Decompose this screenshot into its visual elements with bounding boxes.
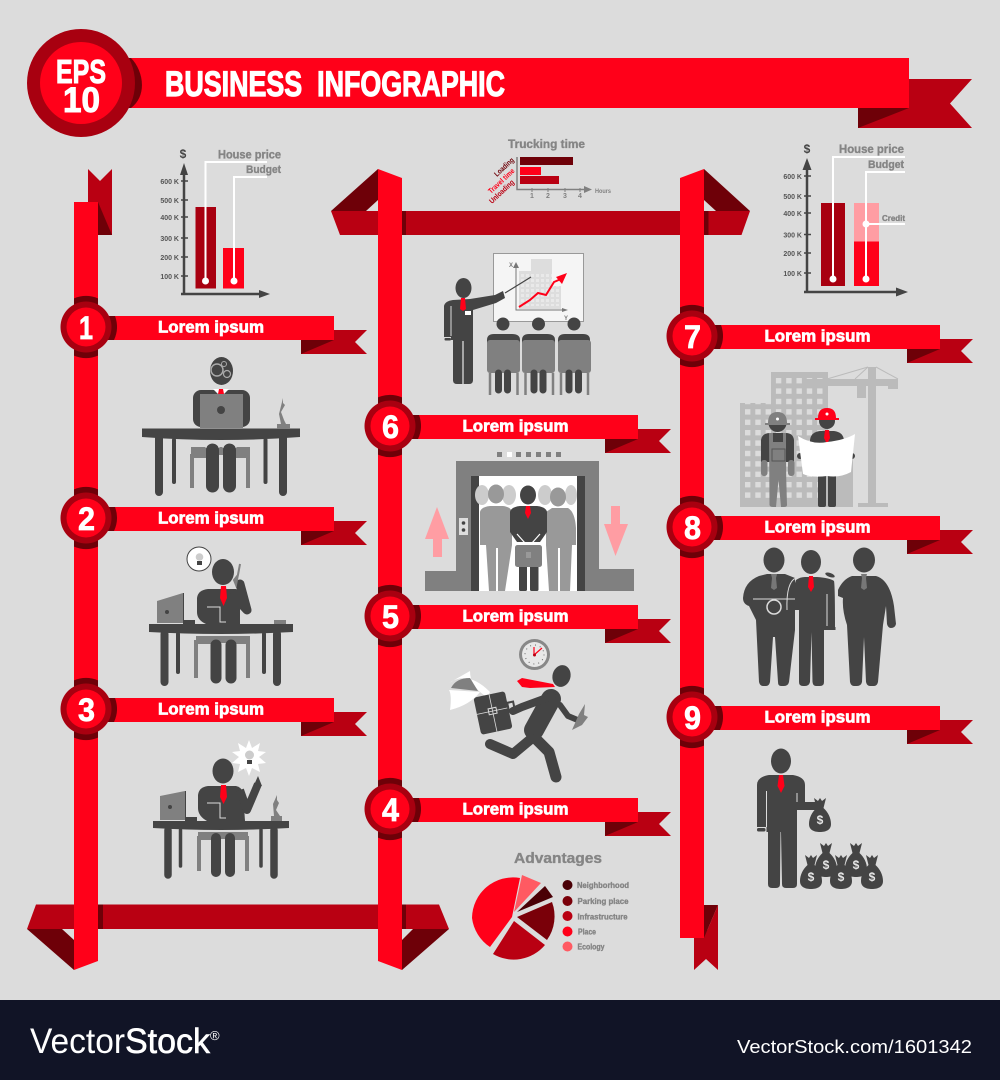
step 3 ribbon <box>60 678 367 740</box>
chart: trucking time: Unloading <box>487 178 516 205</box>
step 6 ribbon: Lorem ipsum <box>462 416 568 436</box>
step 7 ribbon: Lorem ipsum <box>764 326 870 346</box>
footer logo: Vector <box>30 1022 125 1061</box>
chart: house price vs budget: House price <box>218 150 281 162</box>
passenger left <box>480 484 512 591</box>
chart: house price vs budget <box>160 147 281 298</box>
chart: house price, budget and credit: 600 K <box>783 174 802 181</box>
step 6 ribbon <box>364 395 671 457</box>
illustration: construction site <box>740 367 898 507</box>
money bags: $ <box>869 870 876 884</box>
audience member 3 <box>558 318 591 395</box>
illustration: man with money bags <box>757 748 883 889</box>
step 2 ribbon: Lorem ipsum <box>158 508 264 528</box>
footer logo: Stock <box>125 1022 210 1061</box>
chart: house price vs budget: 500 K <box>160 198 179 205</box>
money bags: $ <box>823 858 830 872</box>
chart: house price, budget and credit: House price <box>839 144 904 156</box>
chart: trucking time: 2 <box>546 193 550 200</box>
step 6 ribbon: 6 <box>382 409 399 445</box>
passenger right <box>546 488 576 591</box>
audience member 2 <box>522 318 555 395</box>
chart: house price, budget and credit: 500 K <box>783 194 802 201</box>
step 1 ribbon <box>60 296 367 358</box>
whiteboard: Y <box>564 316 568 322</box>
engineer <box>797 408 855 507</box>
telephone <box>271 795 282 821</box>
legend: Neighborhood <box>577 881 629 890</box>
runner <box>490 663 580 777</box>
idea burst <box>232 740 266 776</box>
money bags: $ <box>808 870 815 884</box>
chart: trucking time: Trucking time <box>508 137 585 151</box>
step 2 ribbon: 2 <box>78 501 95 537</box>
legend: Place <box>578 928 596 936</box>
arrow up <box>425 507 449 557</box>
crane <box>803 367 898 507</box>
footer logo <box>30 1022 220 1061</box>
legend: Ecology <box>578 942 605 952</box>
step 8 ribbon <box>666 496 973 558</box>
badge text: EPS 10 <box>56 53 106 120</box>
clock <box>519 639 550 670</box>
step 7 ribbon <box>666 305 973 367</box>
chart: house price vs budget: 200 K <box>160 255 179 262</box>
briefcase <box>515 545 542 567</box>
money bags <box>800 798 883 889</box>
man left <box>743 548 795 686</box>
step 5 ribbon <box>364 585 671 647</box>
money bags: $ <box>853 858 860 872</box>
step 7 ribbon: 7 <box>684 319 701 355</box>
legend <box>562 880 629 952</box>
chart: house price, budget and credit <box>783 142 908 296</box>
chart: house price vs budget: 100 K <box>160 274 179 281</box>
footer url: VectorStock.com/1601342 <box>737 1036 972 1057</box>
step 9 ribbon: 9 <box>684 700 701 736</box>
chart: trucking time: Hours <box>595 189 612 195</box>
chart: house price vs budget: 400 K <box>160 215 179 222</box>
illustration: three businessmen <box>743 548 896 686</box>
phone <box>572 704 588 730</box>
ribbon frame <box>27 169 750 970</box>
header banner <box>27 29 972 137</box>
legend: Parking place <box>578 897 629 906</box>
chart: house price, budget and credit: $ <box>804 142 811 156</box>
chart: house price vs budget: 300 K <box>160 236 179 243</box>
badge text: EPS 10: EPS <box>56 53 106 90</box>
audience <box>487 318 520 395</box>
step 8 ribbon: 8 <box>684 510 701 546</box>
chart: house price vs budget: Budget <box>246 164 281 176</box>
papers <box>449 671 490 710</box>
step 9 ribbon: Lorem ipsum <box>764 708 870 726</box>
step 9 ribbon <box>666 686 973 748</box>
footer bar <box>0 1000 1000 1080</box>
whiteboard: X <box>509 263 513 269</box>
title: BUSINESS INFOGRAPHIC <box>165 65 505 104</box>
chart: house price, budget and credit: 400 K <box>783 211 802 218</box>
chart: trucking time: 1 <box>530 193 534 200</box>
illustration: elevator <box>425 452 634 591</box>
illustration: man with laptop at desk <box>142 357 300 492</box>
step 1 ribbon: Lorem ipsum <box>158 318 264 336</box>
chart: house price, budget and credit: 300 K <box>783 232 802 240</box>
illustration: man on phone at desk <box>149 547 293 682</box>
step 2 ribbon <box>60 487 367 549</box>
badge text: EPS 10: 10 <box>63 81 100 120</box>
chart: house price, budget and credit: Budget <box>868 159 904 171</box>
man right <box>838 548 896 686</box>
step 5 ribbon: 5 <box>382 599 399 635</box>
step 4 ribbon: Lorem ipsum <box>462 800 568 818</box>
chart: house price, budget and credit: 100 K <box>783 271 802 278</box>
legend: Infrastructure <box>578 912 628 922</box>
tie <box>517 678 555 688</box>
step 4 ribbon <box>364 778 671 840</box>
money bags: $ <box>817 813 824 827</box>
man middle <box>786 550 836 686</box>
handshake <box>753 578 796 614</box>
chart: house price, budget and credit: 200 K <box>783 251 802 258</box>
chart: house price vs budget: $ <box>180 147 187 161</box>
step 5 ribbon: Lorem ipsum <box>462 606 568 626</box>
blueprint <box>798 434 855 477</box>
speech bubble <box>187 547 211 571</box>
step 1 ribbon: 1 <box>79 310 93 346</box>
worker <box>761 412 794 507</box>
gears <box>211 362 230 378</box>
chart: trucking time: 3 <box>563 193 567 200</box>
chart: trucking time <box>486 137 612 205</box>
passenger centre <box>510 486 547 591</box>
illustration: running businessman <box>449 639 588 777</box>
chart: house price, budget and credit: Credit <box>882 213 905 223</box>
money bags: $ <box>838 870 845 884</box>
footer logo: ® <box>210 1028 220 1043</box>
chart: trucking time: Loading <box>492 155 516 178</box>
chart: trucking time: Travel time <box>486 166 516 195</box>
step 4 ribbon: 4 <box>382 792 399 828</box>
presenter <box>444 277 531 384</box>
pie chart: advantages <box>472 850 629 960</box>
arrow down <box>604 506 628 556</box>
telephone <box>277 398 290 429</box>
step 3 ribbon: Lorem ipsum <box>158 700 264 718</box>
pie chart: advantages: Advantages <box>514 850 602 867</box>
whiteboard <box>494 254 584 322</box>
laptop <box>160 791 185 820</box>
illustration: man with idea at desk <box>153 740 289 875</box>
chart: trucking time: 4 <box>578 193 582 200</box>
step 3 ribbon: 3 <box>78 692 95 728</box>
floor indicators <box>497 452 561 457</box>
illustration: presenter with audience <box>444 254 591 395</box>
step 8 ribbon: Lorem ipsum <box>764 518 870 536</box>
briefcase <box>473 690 518 735</box>
chart: house price vs budget: 600 K <box>160 179 179 186</box>
laptop <box>157 593 183 623</box>
